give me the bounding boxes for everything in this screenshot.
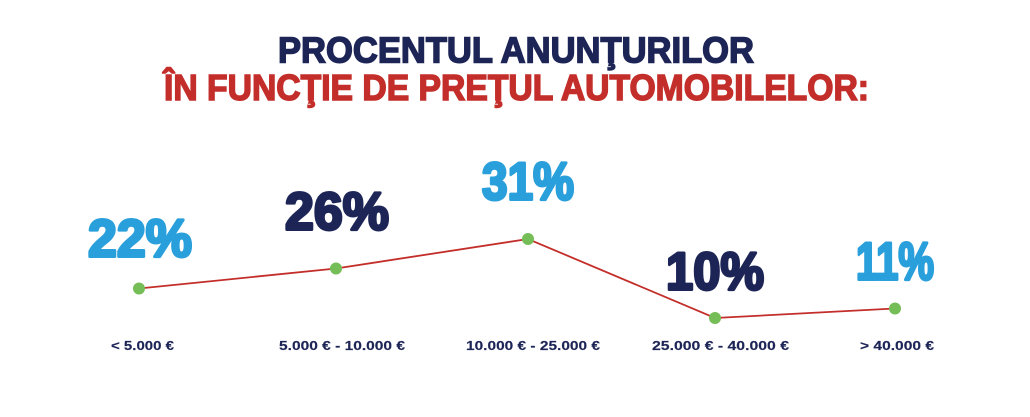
- label 5.000 to 10.000: 5.000 € - 10.000 €: [279, 339, 405, 353]
- label under 5.000: < 5.000 €: [111, 339, 174, 353]
- value 26%: 26%: [285, 182, 389, 242]
- value 22%: 22%: [88, 210, 192, 268]
- line chart: [88, 152, 934, 353]
- data points: [133, 233, 901, 324]
- value 31%: 31%: [482, 152, 574, 212]
- label 25.000 to 40.000: 25.000 € - 40.000 €: [652, 339, 789, 353]
- label 10.000 to 25.000: 10.000 € - 25.000 €: [466, 339, 600, 353]
- value 11%: 11%: [856, 232, 934, 292]
- label over 40.000: > 40.000 €: [860, 339, 934, 353]
- title line 2: ÎN FUNCŢIE DE PREŢUL AUTOMOBILELOR:: [162, 66, 869, 108]
- value 10%: 10%: [666, 242, 764, 302]
- trend line: [139, 239, 895, 318]
- title: [162, 30, 869, 108]
- title line 1: PROCENTUL ANUNŢURILOR: [278, 30, 754, 70]
